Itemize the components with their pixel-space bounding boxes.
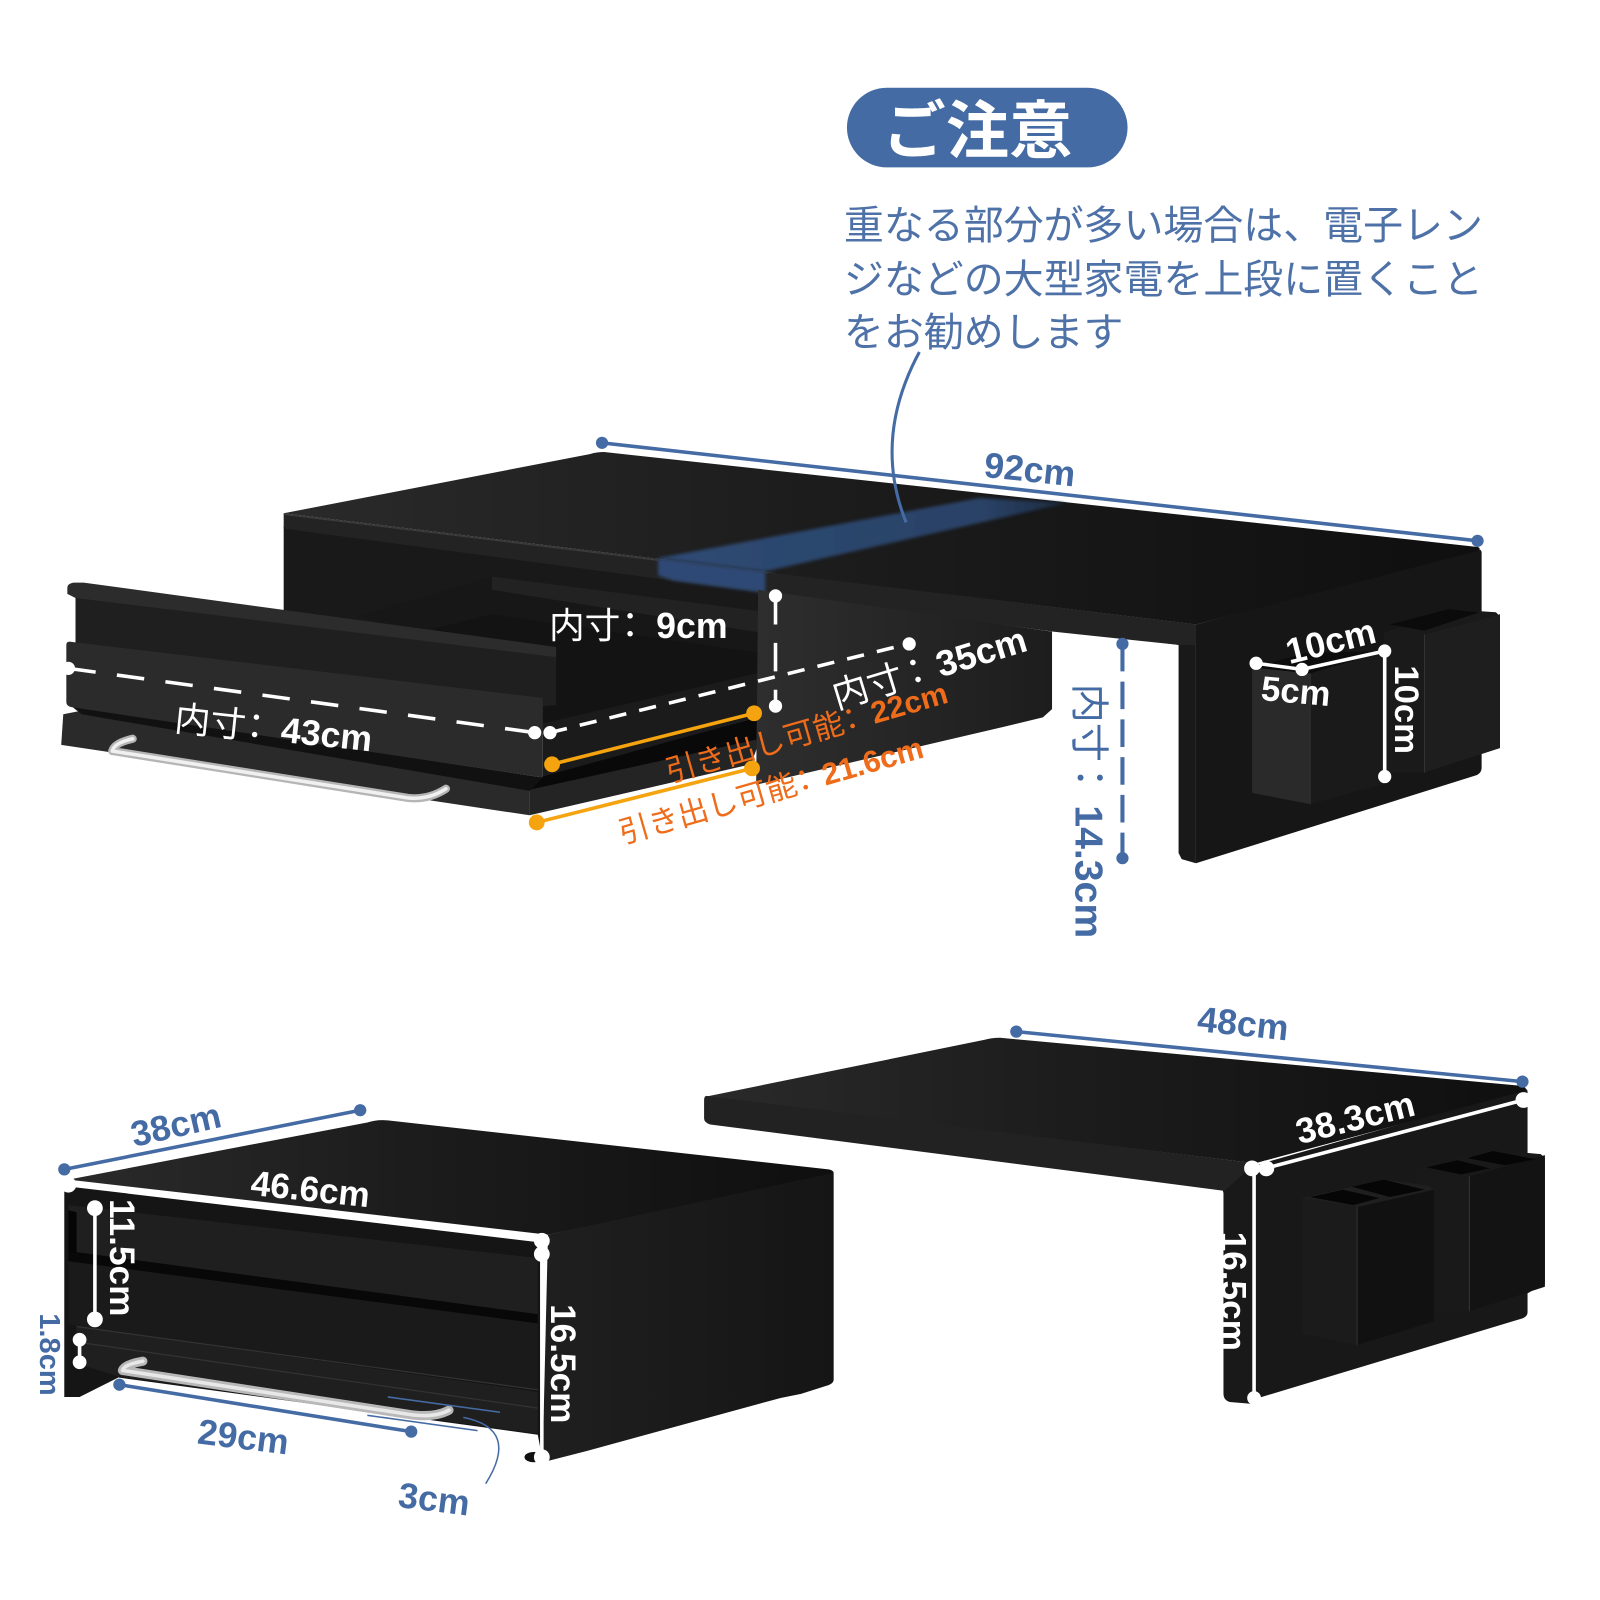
caution text: をお勧めします (844, 311, 1123, 355)
lower unit: top shelf module (704, 1038, 1545, 1404)
lower unit: drawer module (64, 1120, 834, 1462)
label: 1.8cm: 1.8cm (33, 1313, 65, 1396)
label: 46.6cm: 46.6cm (249, 1164, 372, 1215)
dimension: 92cm (596, 437, 1484, 547)
dimension: 29cm (113, 1379, 417, 1462)
shelf front lip (704, 1096, 1255, 1191)
dimension: 38cm: 38cm (127, 1095, 225, 1155)
label: pull-out 21.6cm: 引き出し可能：21.6cm (615, 731, 927, 851)
handle (122, 1361, 449, 1416)
top drawer band (68, 1205, 538, 1314)
dimension: clearance 14.3cm: 内寸： 14.3cm (1067, 684, 1110, 938)
lower unit white dimensions (62, 1179, 548, 1463)
label: inner width 35cm: 内寸：35cm (827, 619, 1032, 717)
dimension: clearance 14.3cm (1067, 638, 1129, 938)
label: 11.5cm: 11.5cm (102, 1199, 141, 1316)
interior behind drawer (284, 527, 760, 714)
interior floor (434, 614, 760, 723)
middle drawer band (66, 642, 543, 778)
label: holder 10cm height: 10cm (1387, 665, 1425, 754)
orange pull-out lines (531, 707, 760, 829)
blue overlap zone on lip (658, 558, 765, 593)
base right side (530, 739, 760, 815)
front pen holder (1302, 1180, 1434, 1345)
upper drawer panel (76, 597, 556, 706)
gap under drawer (526, 716, 760, 791)
right side panel (1196, 549, 1482, 863)
dimension: 29cm: 29cm (196, 1412, 291, 1462)
dimension: 48cm: 48cm (1196, 999, 1291, 1048)
drawer front wall inner (543, 672, 760, 778)
left recess (68, 1210, 77, 1253)
band highlight lines (77, 1327, 538, 1408)
pen holder right (1384, 609, 1500, 772)
dimension: 48cm (1010, 999, 1529, 1088)
middle drawer band (68, 1261, 538, 1390)
caution text: ジなどの大型家電を上段に置くこと (844, 258, 1483, 302)
caution text: 重なる部分が多い場合は、電子レン (844, 204, 1483, 248)
dimension: handle depth 3cm: 3cm (396, 1475, 472, 1524)
label: shelf 16.5cm: 16.5cm (1213, 1232, 1252, 1351)
white inner-dimension lines on top product (62, 590, 1391, 783)
lower drawer band (77, 1327, 538, 1434)
front face (64, 1184, 543, 1461)
gap below band (71, 706, 543, 791)
shelf top surface (704, 1038, 1526, 1163)
shelf leg front edge (1220, 1163, 1255, 1404)
pen holder left (1252, 651, 1385, 804)
interior back rim (492, 577, 760, 633)
label: inner height 9cm: 内寸：9cm (549, 606, 728, 646)
dimension: 38cm (58, 1095, 366, 1176)
top surface (284, 452, 1480, 624)
drawer pulled out (61, 577, 760, 815)
shelf white dimensions (1246, 1094, 1530, 1403)
drawer interior (357, 577, 760, 735)
label: pull-out 22cm: 引き出し可能：22cm (662, 676, 952, 789)
title badge: ご注意 (883, 97, 1072, 167)
lower unit right side panel in top product (756, 590, 1052, 785)
blue overlap zone on top (658, 498, 1066, 571)
label: holder 10cm width: 10cm (1282, 611, 1380, 672)
label: 38.3cm: 38.3cm (1292, 1084, 1419, 1152)
caution text (844, 204, 1483, 355)
lip highlight (284, 514, 658, 560)
label: 16.5cm: 16.5cm (543, 1304, 582, 1423)
foot (524, 1452, 543, 1462)
label: inner depth 43cm: 内寸：43cm (173, 699, 374, 759)
dimension: 92cm: 92cm (982, 445, 1077, 494)
dimension: handle depth 3cm (367, 1397, 500, 1524)
base slab (61, 710, 530, 815)
right leg front edge (765, 571, 1196, 863)
callout leader curve (892, 352, 919, 522)
title badge (847, 88, 1128, 167)
dark groove (68, 1251, 538, 1323)
label: holder 5cm depth: 5cm (1260, 670, 1332, 714)
shelf side panel (1255, 1089, 1528, 1399)
front lip (284, 513, 1196, 645)
top product: assembled shelf (284, 452, 1500, 863)
drawer handle (112, 739, 446, 798)
rear pen holder (1416, 1150, 1545, 1311)
top drawer lip (67, 583, 556, 657)
right face (543, 1170, 834, 1462)
top face (68, 1120, 832, 1235)
